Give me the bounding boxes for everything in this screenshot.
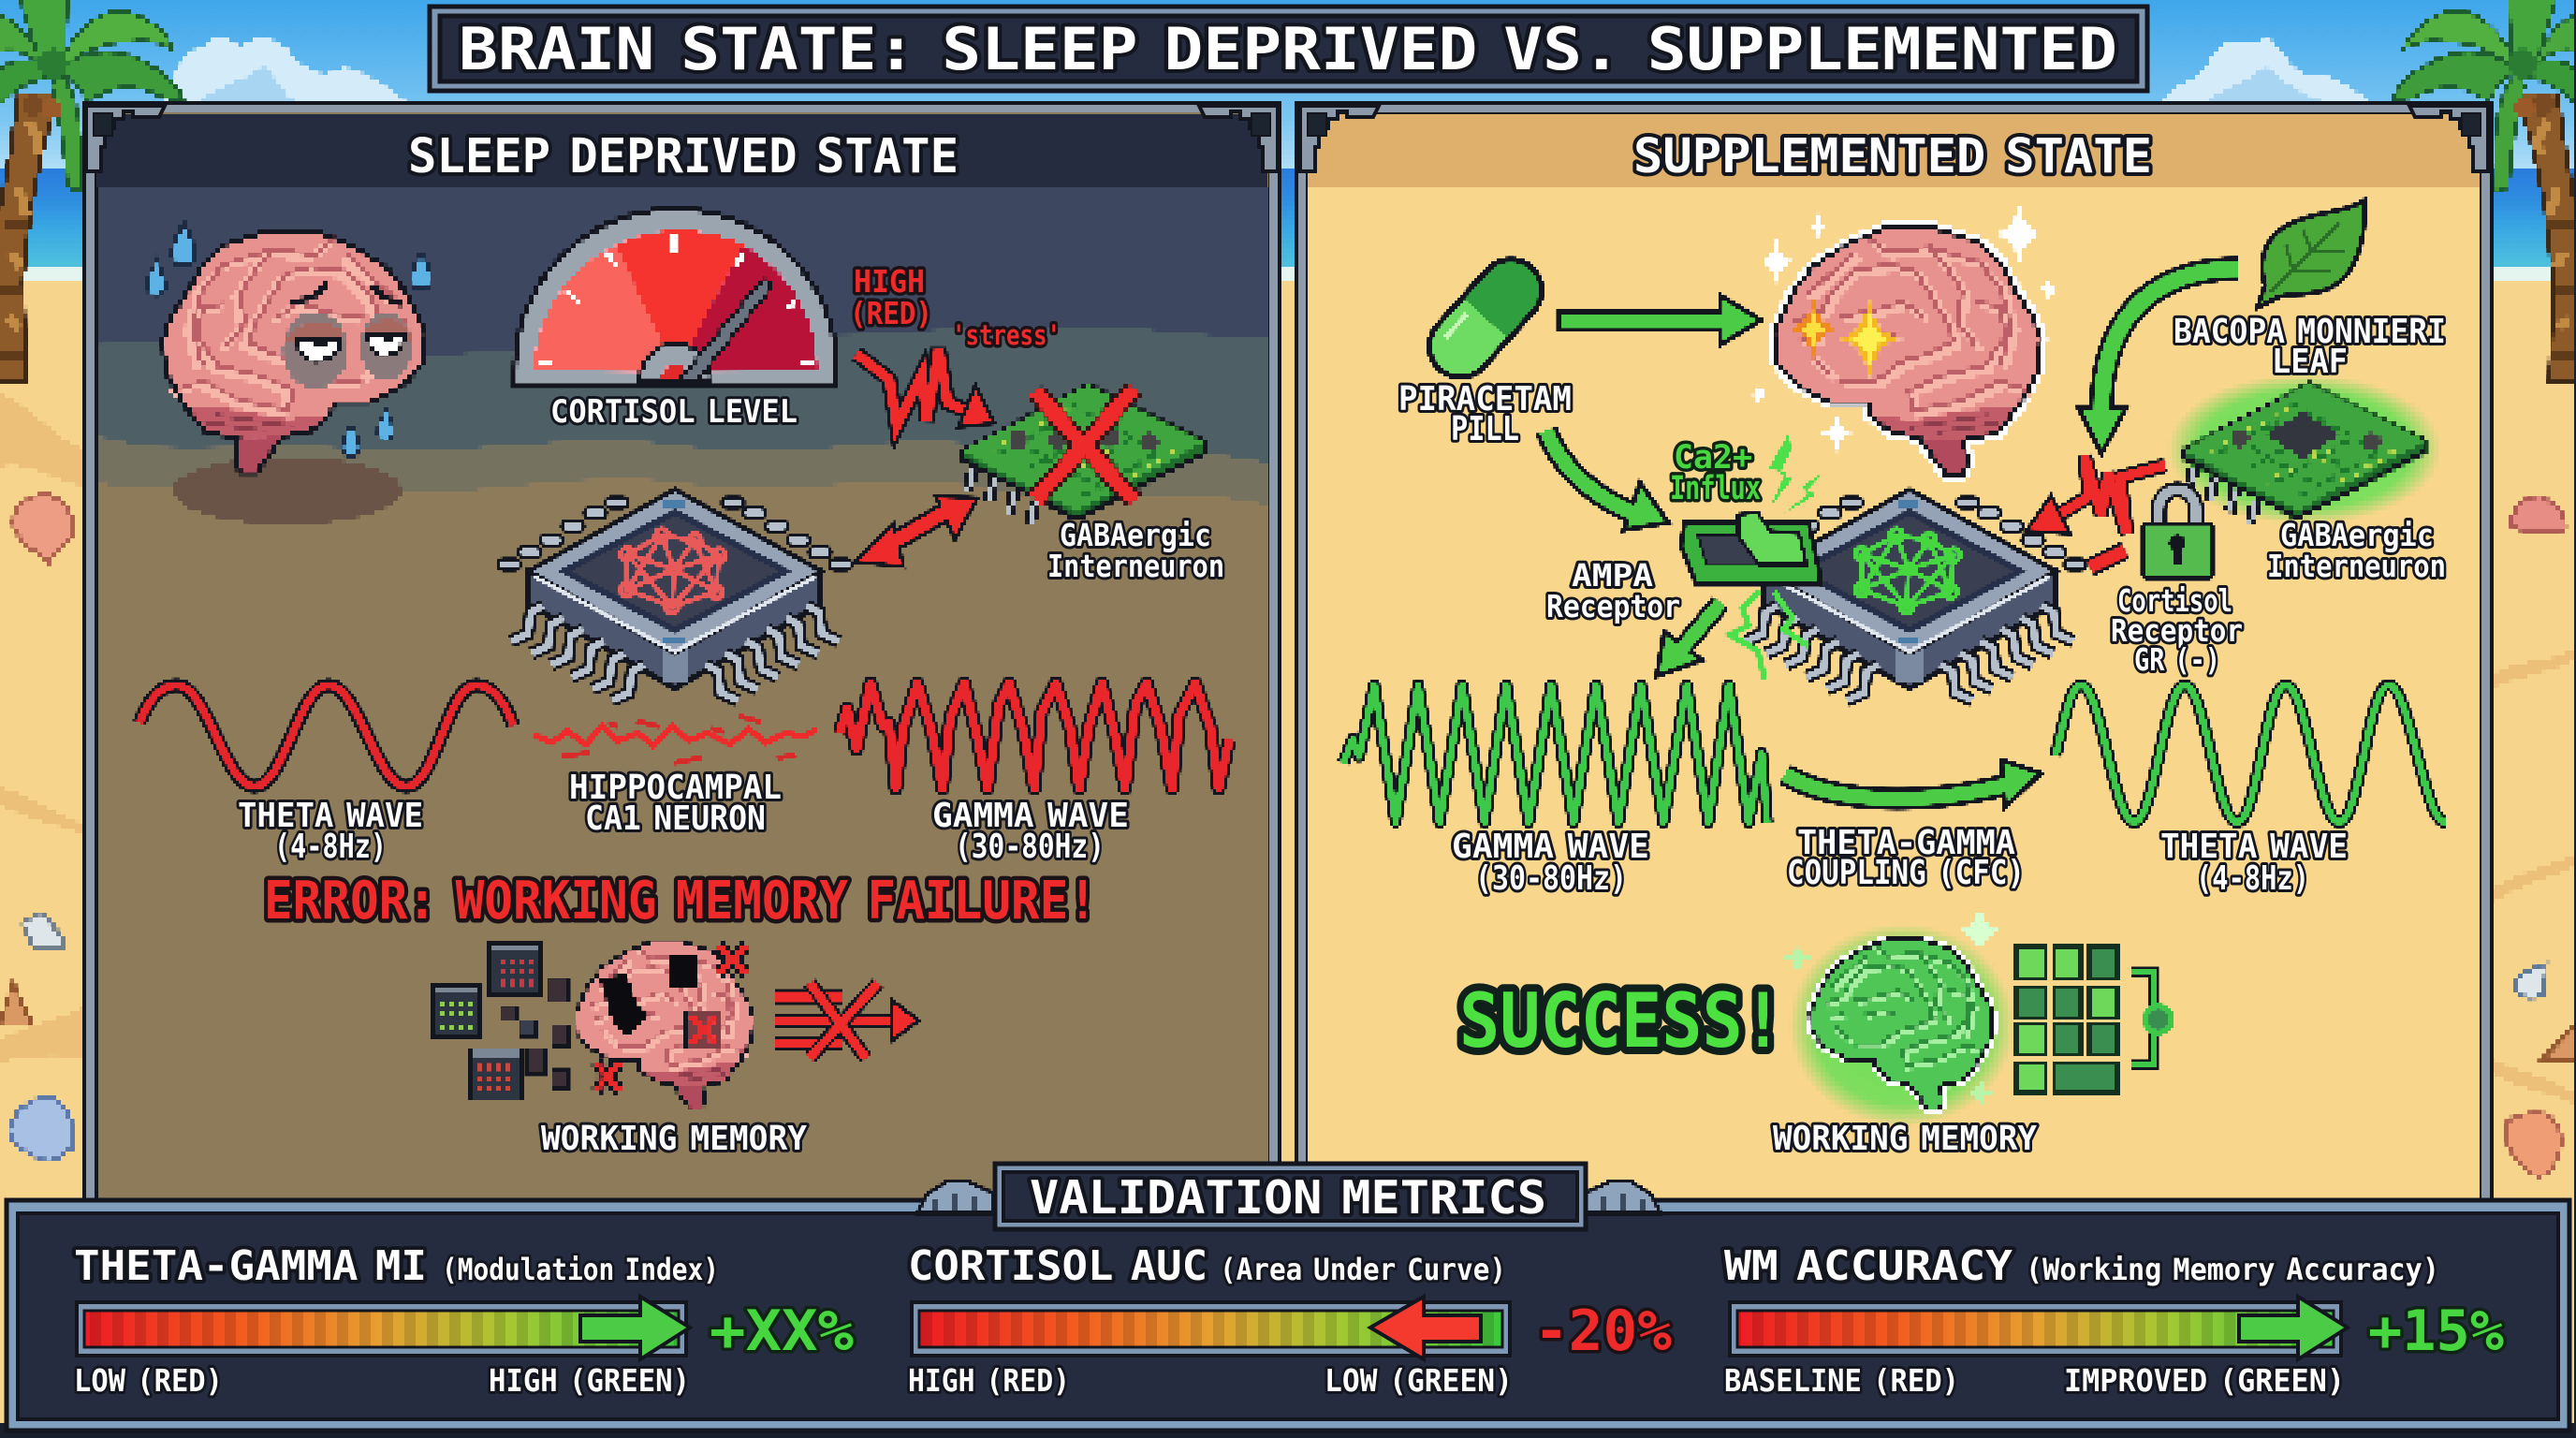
value: -20%: -20% [1534,1299,1672,1364]
scale labels: LOW (RED) [74,1362,223,1399]
label: GABAergic interneuron (right): GABAergic [2280,517,2434,553]
scale labels: HIGH (RED) [908,1362,1070,1399]
label: GABAergic interneuron (right) [2267,517,2446,584]
label: theta wave (left): (4-8Hz) [274,828,387,866]
arrow: leaf to cortisol pathway [2079,269,2239,453]
label: GABAergic interneuron (right): Interneuron [2267,548,2446,584]
label: cortisol receptor GR: Cortisol [2117,582,2232,619]
label: theta wave (right): (4-8Hz) [2196,859,2309,898]
scale labels [74,1362,690,1399]
label: high (red): (RED) [850,295,932,331]
heading: validation metrics: VALIDATION METRICS [1030,1171,1546,1225]
label: piracetam pill [1398,380,1572,448]
label: bacopa monnieri leaf: LEAF [2272,343,2348,381]
chart: theta wave (left) [139,685,513,786]
icon: memory grid with bracket [2016,946,2172,1093]
chart: disrupted neuron signal [534,716,816,763]
label: stress: 'stress' [952,319,1061,351]
label: cortisol receptor GR [2111,582,2243,678]
label: hippocampal CA1 neuron: CA1 NEURON [585,800,766,838]
label: cortisol receptor GR: Receptor [2111,612,2243,649]
label: AMPA receptor [1546,557,1680,624]
icon: glowing green brain [1784,906,2014,1126]
icon: damaged brain with scattered memory cards [432,942,754,1109]
arrow: cortisol zigzag blocked [2027,456,2165,567]
icon: AMPA receptor switch [1681,512,1820,583]
icon: calcium lightning bolts [1730,435,1823,679]
icon: green padlock [2144,490,2212,578]
label: cortisol level: CORTISOL LEVEL [550,393,798,431]
metric: theta-gamma MI: THETA-GAMMA MI [74,1242,427,1290]
arrow: decrease [1370,1297,1481,1359]
metric: WM accuracy: (Working Memory Accuracy) [2026,1252,2439,1287]
metric: cortisol AUC: (Area Under Curve) [1220,1252,1506,1287]
label: gamma wave (left): (30-80Hz) [955,828,1105,866]
callout: success: SUCCESS! [1459,977,1783,1064]
arrow: increase [580,1297,690,1359]
label: working memory (left): WORKING MEMORY [541,1120,807,1158]
scale labels: LOW (GREEN) [1325,1362,1513,1399]
label: high (red) [850,263,932,331]
label: gamma wave (left): GAMMA WAVE [932,797,1129,835]
label: high (red): HIGH [854,263,925,300]
chart: gamma wave (right) [1343,685,1767,822]
label: Ca2+ influx: Ca2+ [1674,439,1752,477]
metric: cortisol AUC [908,1242,1672,1399]
label: hippocampal CA1 neuron: HIPPOCAMPAL [569,769,782,807]
icon: healthy GABAergic chip [2168,374,2441,524]
icon: seashells left [0,494,73,1161]
chart: theta wave (right) [2056,685,2445,822]
label: working memory (right): WORKING MEMORY [1773,1120,2037,1158]
panel: sleep deprived state [84,103,1280,1210]
label: theta wave (right): THETA WAVE [2160,828,2348,866]
panel: validation metrics [0,1164,2576,1438]
label: GABAergic interneuron (left): Interneuron [1047,548,1224,584]
label: theta wave (right) [2160,828,2348,898]
arrow: stress zigzag to interneuron [856,348,994,427]
scale labels: BASELINE (RED) [1724,1362,1959,1399]
label: piracetam pill: PIRACETAM [1398,380,1572,418]
label: Ca2+ influx [1670,439,1761,507]
value: +XX%: +XX% [710,1299,854,1364]
label: GABAergic interneuron (left) [1047,517,1224,584]
arrow: blocked memory signal [775,983,918,1058]
arrow: pill to AMPA [1546,431,1668,530]
gauge: cortisol level [515,209,837,384]
icon: sparkling healthy brain [1750,204,2058,475]
metric: WM accuracy [1724,1242,2504,1399]
icon: neural chip with green network [1738,490,2081,700]
label: bacopa monnieri leaf [2174,313,2446,381]
label: AMPA receptor: AMPA [1572,557,1653,594]
right panel corner ornaments [1300,106,2488,171]
left panel header band [96,114,1267,187]
left panel backdrop [96,114,1267,1210]
label: theta-gamma coupling: THETA-GAMMA [1797,824,2015,862]
metric: WM accuracy: WM ACCURACY [1724,1242,2013,1290]
heading: validation metrics [995,1164,1586,1229]
metric: theta-gamma MI [74,1242,854,1399]
metric: cortisol AUC: CORTISOL AUC [908,1242,1208,1290]
label: theta-gamma coupling [1787,824,2025,892]
arrow: improvement [2239,1297,2348,1359]
label: GABAergic interneuron (left): GABAergic [1060,517,1211,553]
title banner: BRAIN STATE: SLEEP DEPRIVED VS. SUPPLEMENTED [459,15,2117,83]
label: AMPA receptor: Receptor [1546,588,1680,624]
heading: sleep deprived state: SLEEP DEPRIVED STATE [408,129,959,184]
label: cortisol receptor GR: GR (-) [2134,641,2220,678]
arrow: AMPA to gamma wave [1657,603,1720,676]
icon: hippocampal CA1 chip [504,490,846,700]
label: theta wave (left): THETA WAVE [238,797,423,835]
icon: brain shadow [173,457,402,524]
scale labels [908,1362,1513,1399]
icon: left palm tree [0,0,183,381]
right panel header band [1308,114,2480,187]
bar: cortisol gradient [912,1302,1510,1356]
arrow: double headed red [855,496,977,566]
label: Ca2+ influx: Influx [1670,470,1761,507]
bar: WM accuracy gradient [1730,1302,2341,1356]
label: gamma wave (right): GAMMA WAVE [1452,828,1649,866]
chart: gamma wave (left) [840,683,1229,788]
heading: supplemented state: SUPPLEMENTED STATE [1633,129,2152,184]
bar: theta-gamma gradient [77,1302,686,1356]
scale labels: HIGH (GREEN) [489,1362,690,1399]
label: piracetam pill: PILL [1451,410,1519,448]
title banner [430,7,2147,91]
icon: exhausted sweating brain [147,221,431,473]
callout: working memory error: ERROR: WORKING MEMORY FAILURE! [264,871,1097,932]
icon: seashells right [2505,496,2576,1176]
arrow: pill to brain [1559,296,1761,345]
icon: failing GABAergic chip [962,385,1204,524]
panel: supplemented state [1296,103,2492,1210]
left panel corner ornaments [86,106,1278,171]
scale labels: IMPROVED (GREEN) [2064,1362,2345,1399]
label: gamma wave (right) [1452,828,1649,898]
icon: bacopa monnieri leaf [2258,200,2364,307]
icon: right palm tree [2393,0,2576,381]
scale labels [1724,1362,2345,1399]
label: theta wave (left) [238,797,423,866]
label: theta-gamma coupling: COUPLING (CFC) [1787,854,2025,892]
label: hippocampal CA1 neuron [569,769,782,838]
arrow: theta-gamma coupling [1785,760,2041,807]
icon: piracetam pill [1412,242,1559,394]
decorative header ornaments [917,1181,1661,1213]
label: gamma wave (left) [932,797,1129,866]
value: +15%: +15% [2368,1299,2504,1364]
label: gamma wave (right): (30-80Hz) [1475,859,1627,898]
label: bacopa monnieri leaf: BACOPA MONNIERI [2174,313,2446,351]
metric: theta-gamma MI: (Modulation Index) [442,1252,719,1287]
